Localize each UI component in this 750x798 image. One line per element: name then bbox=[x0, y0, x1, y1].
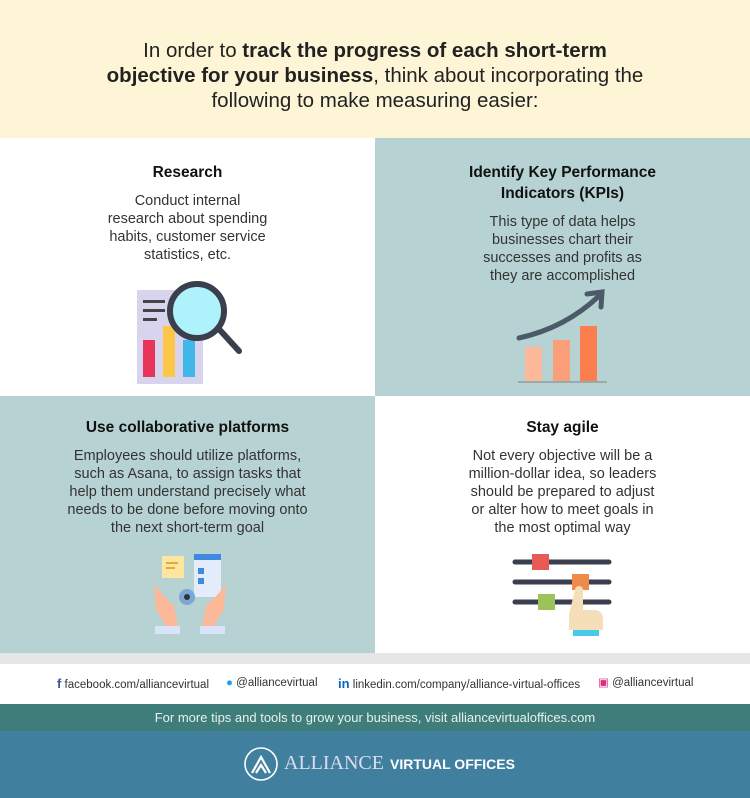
text: research: habits, customer service bbox=[109, 229, 266, 245]
panel: kpis bbox=[375, 138, 750, 396]
social links: ● @alliancevirtual bbox=[226, 677, 318, 689]
heading: kpis: Indicators (KPIs) bbox=[501, 185, 624, 202]
text: research: Conduct internal bbox=[135, 193, 240, 209]
header bbox=[0, 0, 750, 138]
text: kpis bbox=[483, 214, 642, 284]
text: research: research about spending bbox=[108, 211, 267, 227]
heading: research: Research bbox=[153, 164, 222, 181]
social links bbox=[57, 676, 693, 691]
text: collaborative: such as Asana, to assign tasks that bbox=[74, 466, 301, 482]
panel: research bbox=[0, 138, 375, 396]
panel: agile bbox=[375, 396, 750, 653]
icon: magnifier chart bbox=[137, 281, 242, 384]
social links: f facebook.com/alliancevirtual bbox=[57, 676, 209, 691]
icon: growth chart bbox=[516, 289, 607, 383]
icon: sliders bbox=[512, 554, 612, 636]
text: agile: Not every objective will be a bbox=[473, 448, 652, 464]
text: kpis: businesses chart their bbox=[492, 232, 633, 248]
heading: kpis: Identify Key Performance bbox=[469, 164, 656, 181]
text: kpis: they are accomplished bbox=[490, 268, 635, 284]
text: research: statistics, etc. bbox=[144, 247, 231, 263]
logo bbox=[244, 747, 515, 781]
text: agile: should be prepared to adjust bbox=[471, 484, 654, 500]
text: agile: million-dollar idea, so leaders bbox=[469, 466, 656, 482]
social links: in linkedin.com/company/alliance-virtual-offices bbox=[338, 676, 580, 691]
text: research bbox=[108, 193, 267, 263]
heading: kpis bbox=[469, 164, 656, 202]
text: collaborative: needs to be done before moving onto bbox=[67, 502, 308, 518]
header: objective for your business, think about incorporating the bbox=[107, 64, 643, 87]
text: collaborative: the next short-term goal bbox=[111, 520, 264, 536]
footer logo bar bbox=[0, 731, 750, 798]
text: collaborative: Employees should utilize platforms, bbox=[74, 448, 301, 464]
text: collaborative: help them understand precisely what bbox=[69, 484, 306, 500]
header: In order to track the progress of each short-term bbox=[143, 39, 607, 62]
text: agile: or alter how to meet goals in bbox=[471, 502, 654, 518]
text: agile bbox=[469, 448, 656, 536]
heading: agile: Stay agile bbox=[526, 419, 599, 436]
social links: ▣ @alliancevirtual bbox=[598, 677, 693, 689]
text: collaborative bbox=[67, 448, 308, 536]
text: kpis: successes and profits as bbox=[483, 250, 642, 266]
logo: VIRTUAL OFFICES bbox=[390, 756, 515, 772]
header: following to make measuring easier: bbox=[211, 89, 539, 112]
panel: collaborative bbox=[0, 396, 375, 653]
text: kpis: This type of data helps bbox=[490, 214, 635, 230]
logo: ALLIANCE bbox=[284, 752, 384, 774]
divider bar bbox=[0, 653, 750, 664]
heading: collaborative: Use collaborative platforms bbox=[86, 419, 289, 436]
footer tips bar bbox=[0, 704, 750, 731]
text: agile: the most optimal way bbox=[494, 520, 631, 536]
footer tips bar: For more tips and tools to grow your business, visit alliancevirtualoffices.com bbox=[155, 710, 595, 725]
icon: hands with apps bbox=[154, 554, 226, 634]
